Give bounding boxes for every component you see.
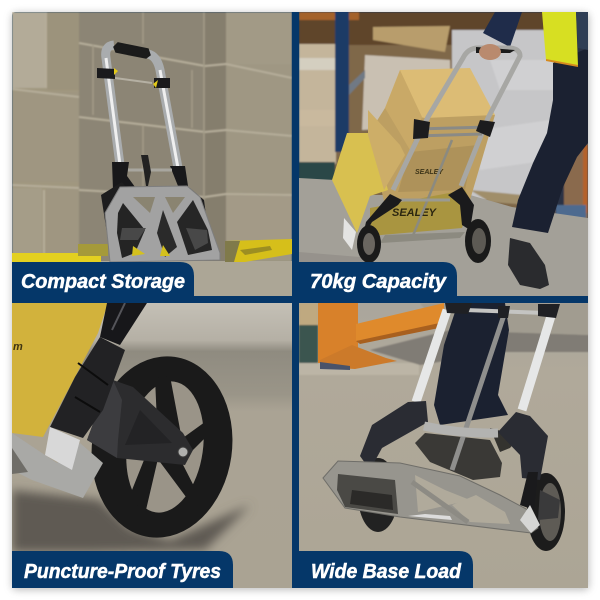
center rod	[452, 312, 505, 470]
box backing	[368, 108, 495, 205]
panel: compact storage	[12, 12, 292, 297]
pallet wrap	[299, 44, 336, 164]
pallet post	[335, 12, 349, 152]
hand	[479, 44, 501, 60]
floor shadow patches	[12, 490, 250, 552]
floor	[299, 178, 588, 297]
boxes: SEALEY	[392, 207, 438, 219]
person leg	[434, 303, 509, 425]
caption tab: capacity	[299, 262, 457, 297]
top bar and clamps	[465, 310, 545, 313]
background wall and shadow	[299, 303, 590, 375]
right wheel	[465, 219, 491, 263]
wheel brackets	[365, 187, 474, 228]
panel: puncture-proof tyres: m	[13, 341, 23, 353]
tyre	[80, 347, 244, 547]
boxes: SEALEY	[415, 169, 444, 176]
caption text: Compact Storage	[21, 271, 185, 293]
caption tab: compact storage	[12, 262, 194, 297]
wheel	[80, 347, 244, 547]
shelf right	[564, 140, 588, 218]
caption tab: tyres	[12, 551, 233, 589]
base plate	[105, 186, 220, 262]
base plate	[323, 461, 538, 533]
caption text: Wide Base Load	[311, 561, 462, 583]
top box	[385, 68, 495, 118]
trolley frame	[343, 44, 520, 263]
rim opening	[118, 376, 212, 518]
sleeve	[483, 12, 522, 47]
orange racking	[318, 303, 444, 370]
warehouse floor	[299, 303, 588, 588]
left and right tubes	[416, 310, 551, 410]
caption text: 70kg Capacity	[310, 271, 447, 293]
front box	[398, 145, 478, 192]
lower brackets	[112, 162, 188, 190]
base plate openings	[117, 203, 145, 258]
metal base plate	[12, 433, 103, 498]
trolley	[323, 303, 565, 551]
yellow box	[12, 303, 108, 437]
left wheel	[357, 225, 381, 263]
plate openings	[337, 474, 398, 514]
concrete block wall	[12, 12, 292, 262]
concrete floor	[12, 303, 292, 588]
warehouse background	[299, 12, 588, 218]
dark tube	[100, 303, 147, 345]
shoe	[508, 238, 549, 289]
caption tab: wide base	[299, 551, 473, 589]
left wheel	[358, 458, 398, 532]
hi-vis vest	[542, 12, 578, 66]
wheel hub arm	[87, 380, 193, 465]
middle box	[368, 110, 405, 190]
caption text: Puncture-Proof Tyres	[24, 561, 221, 583]
axle bolt	[178, 447, 188, 457]
yellow kerb	[12, 239, 292, 262]
lower yellow box	[332, 133, 388, 233]
brand box	[370, 190, 470, 236]
handle clamps	[97, 68, 170, 88]
person leg	[512, 48, 588, 233]
cross tube	[424, 426, 498, 433]
spokes	[128, 376, 219, 510]
right bracket	[498, 412, 548, 480]
grip	[114, 43, 150, 58]
black tube sleeve	[50, 337, 125, 438]
floor	[101, 261, 292, 296]
panel: puncture-proof tyres	[12, 303, 292, 589]
folded trolley	[97, 43, 220, 262]
right wheel	[527, 473, 565, 551]
boxes	[332, 68, 495, 236]
shoes	[415, 433, 502, 480]
panel: capacity	[299, 12, 588, 297]
left bracket	[360, 401, 428, 470]
panel: wide base load	[299, 303, 590, 589]
folded trolley handle tubes	[106, 45, 178, 168]
